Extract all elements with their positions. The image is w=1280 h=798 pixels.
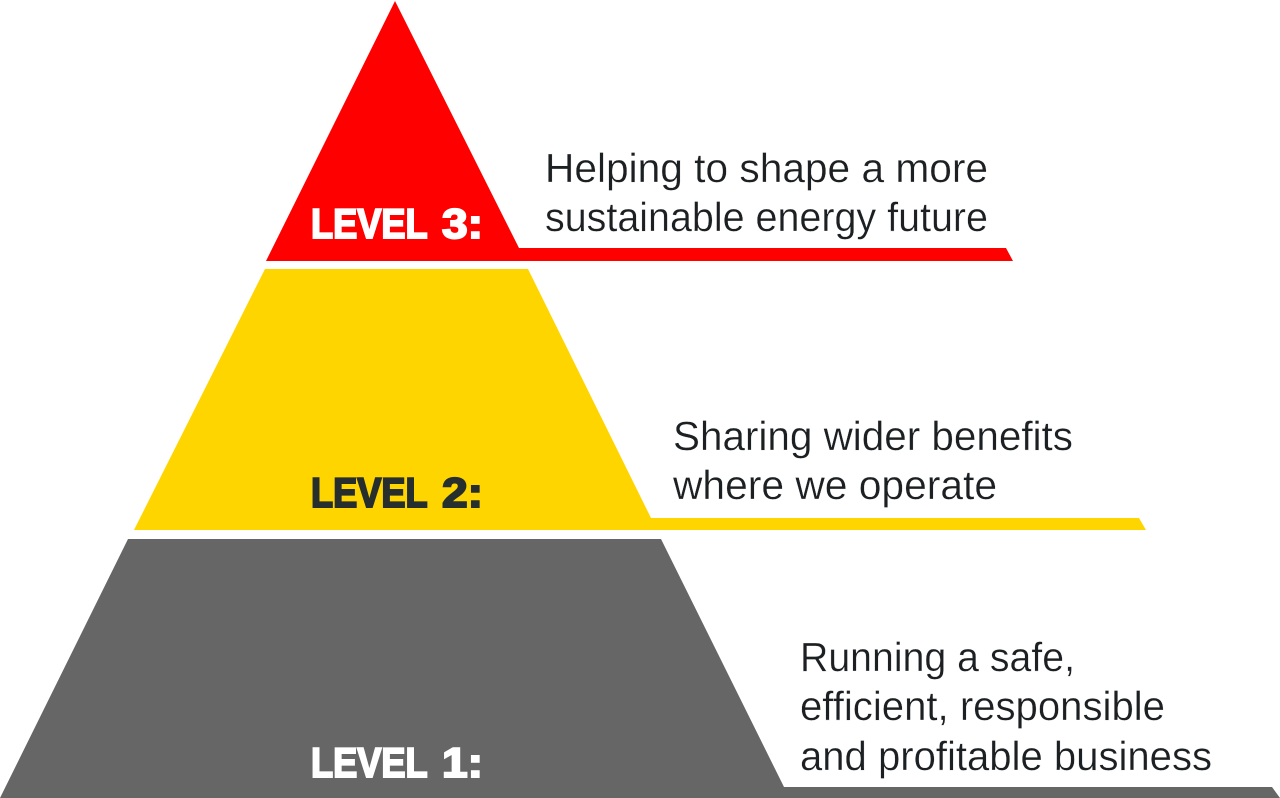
- level 2 description: where we operate: [672, 462, 997, 508]
- level 1 description: efficient, responsible: [800, 683, 1165, 729]
- level 3 label: 3:: [442, 200, 483, 247]
- level 3 description: Helping to shape a more: [545, 145, 988, 191]
- level 1 description: [800, 634, 1212, 779]
- level 2 description: [672, 413, 1073, 508]
- level 3 description: [545, 145, 988, 240]
- level 1 label: 1:: [442, 739, 483, 786]
- level 3 description: sustainable energy future: [545, 194, 988, 240]
- level 3 label: LEVEL: [311, 200, 427, 247]
- level 2 tier: yellow trapezoid with rule: [134, 269, 1146, 530]
- level 2 description: Sharing wider benefits: [673, 413, 1073, 459]
- level 3 tier: red triangle with rule: [266, 1, 1013, 261]
- level 2 label: 2:: [442, 469, 483, 516]
- level 1 tier: grey trapezoid with rule: [0, 539, 1280, 798]
- level 1 label: LEVEL: [311, 739, 427, 786]
- level 1 description: Running a safe,: [800, 634, 1075, 680]
- level 1 description: and profitable business: [800, 733, 1212, 779]
- level 2 label: LEVEL: [311, 469, 427, 516]
